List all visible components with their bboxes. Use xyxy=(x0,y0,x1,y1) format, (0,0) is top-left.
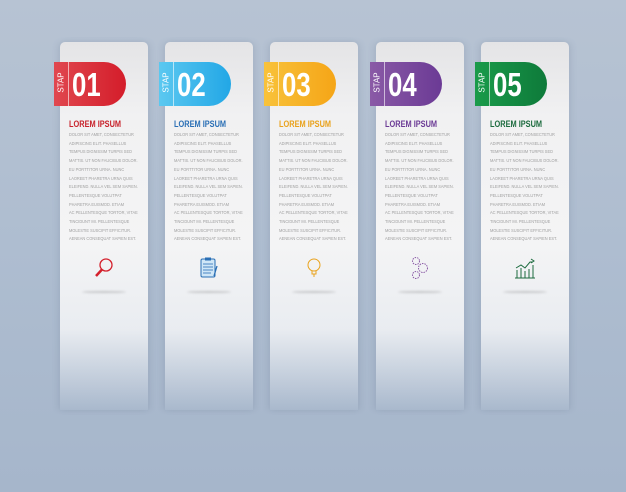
text 4: PELLENTESQUE VOLUTPAT xyxy=(385,193,438,198)
text 2: TINCIDUNT MI. PELLENTESQUE xyxy=(174,219,234,224)
text 5: PHARETRA EUISMOD. ETIAM xyxy=(490,202,545,207)
text 2: ADIPISCING ELIT. PHASELLUS xyxy=(174,141,231,146)
text 5: MOLESTIE SUSCIPIT EFFICITUR. xyxy=(490,228,552,233)
text 2: TEMPUS DIGNISSIM TURPIS SED xyxy=(174,149,237,154)
text 1: TINCIDUNT MI. PELLENTESQUE xyxy=(69,219,129,224)
text 5: ELEIFEND. NULLA VEL SEM SAPIEN. xyxy=(490,184,559,189)
text 3: MOLESTIE SUSCIPIT EFFICITUR. xyxy=(279,228,341,233)
text 5 xyxy=(490,132,559,241)
text 4: DOLOR SIT AMET, CONSECTETUR xyxy=(385,132,450,137)
text 2: PELLENTESQUE VOLUTPAT xyxy=(174,193,227,198)
text 3: DOLOR SIT AMET, CONSECTETUR xyxy=(279,132,344,137)
text 3: PELLENTESQUE VOLUTPAT xyxy=(279,193,332,198)
text 2: EU PORTTITOR URNA. NUNC xyxy=(174,167,229,172)
text 5: AC PELLENTESQUE TORTOR, VITAE xyxy=(490,210,559,215)
text 1: LAOREET PHARETRA URNA QUIS xyxy=(69,176,133,181)
text 3: ADIPISCING ELIT. PHASELLUS xyxy=(279,141,336,146)
text 4: ADIPISCING ELIT. PHASELLUS xyxy=(385,141,442,146)
text 1: AENEAN CONSEQUAT SAPIEN EST. xyxy=(69,236,136,241)
text 5: MATTIS. UT NON FAUCIBUS DOLOR. xyxy=(490,158,559,163)
text 2 xyxy=(174,132,243,241)
tab 01 xyxy=(54,62,126,106)
text 4: EU PORTTITOR URNA. NUNC xyxy=(385,167,440,172)
text 2: AC PELLENTESQUE TORTOR, VITAE xyxy=(174,210,243,215)
text 5: TINCIDUNT MI. PELLENTESQUE xyxy=(490,219,550,224)
heading 5: LOREM IPSUM xyxy=(490,119,542,129)
text 3: AENEAN CONSEQUAT SAPIEN EST. xyxy=(279,236,346,241)
icon: chart xyxy=(515,258,535,278)
text 2: LAOREET PHARETRA URNA QUIS xyxy=(174,176,238,181)
text 4: AENEAN CONSEQUAT SAPIEN EST. xyxy=(385,236,452,241)
text 4 xyxy=(385,132,454,241)
tab 02: STAP xyxy=(162,72,170,93)
card 5 xyxy=(481,42,569,410)
text 4: MOLESTIE SUSCIPIT EFFICITUR. xyxy=(385,228,447,233)
text 5: AENEAN CONSEQUAT SAPIEN EST. xyxy=(490,236,557,241)
text 3: ELEIFEND. NULLA VEL SEM SAPIEN. xyxy=(279,184,348,189)
text 4: AC PELLENTESQUE TORTOR, VITAE xyxy=(385,210,454,215)
text 3: PHARETRA EUISMOD. ETIAM xyxy=(279,202,334,207)
heading 4: LOREM IPSUM xyxy=(385,119,437,129)
text 2: AENEAN CONSEQUAT SAPIEN EST. xyxy=(174,236,241,241)
heading 2: LOREM IPSUM xyxy=(174,119,226,129)
card 1 xyxy=(60,42,148,410)
text 3: TEMPUS DIGNISSIM TURPIS SED xyxy=(279,149,342,154)
text 4: LAOREET PHARETRA URNA QUIS xyxy=(385,176,449,181)
text 4: TEMPUS DIGNISSIM TURPIS SED xyxy=(385,149,448,154)
tab 03 xyxy=(264,62,336,106)
icon: bulb xyxy=(308,258,320,277)
icon: clipboard xyxy=(200,258,218,278)
tab 04 xyxy=(370,62,442,106)
text 5: TEMPUS DIGNISSIM TURPIS SED xyxy=(490,149,553,154)
text 1: ADIPISCING ELIT. PHASELLUS xyxy=(69,141,126,146)
text 4: PHARETRA EUISMOD. ETIAM xyxy=(385,202,440,207)
text 5: DOLOR SIT AMET, CONSECTETUR xyxy=(490,132,555,137)
icon: gears xyxy=(412,257,428,279)
text 3: MATTIS. UT NON FAUCIBUS DOLOR. xyxy=(279,158,348,163)
tab 01: 01 xyxy=(72,66,101,103)
text 1: TEMPUS DIGNISSIM TURPIS SED xyxy=(69,149,132,154)
text 2: MATTIS. UT NON FAUCIBUS DOLOR. xyxy=(174,158,243,163)
tab 02: 02 xyxy=(177,66,206,103)
text 1: EU PORTTITOR URNA. NUNC xyxy=(69,167,124,172)
text 3: EU PORTTITOR URNA. NUNC xyxy=(279,167,334,172)
card 3 xyxy=(270,42,358,410)
text 1: AC PELLENTESQUE TORTOR, VITAE xyxy=(69,210,138,215)
tab 03: STAP xyxy=(266,72,276,93)
tab 01: STAP xyxy=(56,72,66,93)
text 5: EU PORTTITOR URNA. NUNC xyxy=(490,167,545,172)
tab 04: 04 xyxy=(388,66,417,103)
tab 03: 03 xyxy=(282,66,311,103)
text 5: PELLENTESQUE VOLUTPAT xyxy=(490,193,543,198)
text 1: PELLENTESQUE VOLUTPAT xyxy=(69,193,122,198)
tab 02 xyxy=(159,62,231,106)
text 1 xyxy=(69,132,138,241)
text 3: AC PELLENTESQUE TORTOR, VITAE xyxy=(279,210,348,215)
text 4: TINCIDUNT MI. PELLENTESQUE xyxy=(385,219,445,224)
text 3 xyxy=(279,132,348,241)
tab 04: STAP xyxy=(372,72,382,93)
text 1: ELEIFEND. NULLA VEL SEM SAPIEN. xyxy=(69,184,138,189)
text 4: MATTIS. UT NON FAUCIBUS DOLOR. xyxy=(385,158,454,163)
heading 1: LOREM IPSUM xyxy=(69,119,121,129)
text 5: ADIPISCING ELIT. PHASELLUS xyxy=(490,141,547,146)
card 2 xyxy=(165,42,253,410)
text 1: MOLESTIE SUSCIPIT EFFICITUR. xyxy=(69,228,131,233)
text 1: DOLOR SIT AMET, CONSECTETUR xyxy=(69,132,134,137)
tab 05: STAP xyxy=(478,72,486,93)
card 4 xyxy=(376,42,464,410)
text 4: ELEIFEND. NULLA VEL SEM SAPIEN. xyxy=(385,184,454,189)
text 1: PHARETRA EUISMOD. ETIAM xyxy=(69,202,124,207)
text 3: TINCIDUNT MI. PELLENTESQUE xyxy=(279,219,339,224)
tab 05 xyxy=(475,62,547,106)
text 2: ELEIFEND. NULLA VEL SEM SAPIEN. xyxy=(174,184,243,189)
text 2: PHARETRA EUISMOD. ETIAM xyxy=(174,202,229,207)
text 5: LAOREET PHARETRA URNA QUIS xyxy=(490,176,554,181)
tab 05: 05 xyxy=(493,66,522,103)
text 2: DOLOR SIT AMET, CONSECTETUR xyxy=(174,132,239,137)
heading 3: LOREM IPSUM xyxy=(279,119,331,129)
icon: magnifier xyxy=(95,258,113,277)
text 3: LAOREET PHARETRA URNA QUIS xyxy=(279,176,343,181)
text 2: MOLESTIE SUSCIPIT EFFICITUR. xyxy=(174,228,236,233)
text 1: MATTIS. UT NON FAUCIBUS DOLOR. xyxy=(69,158,138,163)
